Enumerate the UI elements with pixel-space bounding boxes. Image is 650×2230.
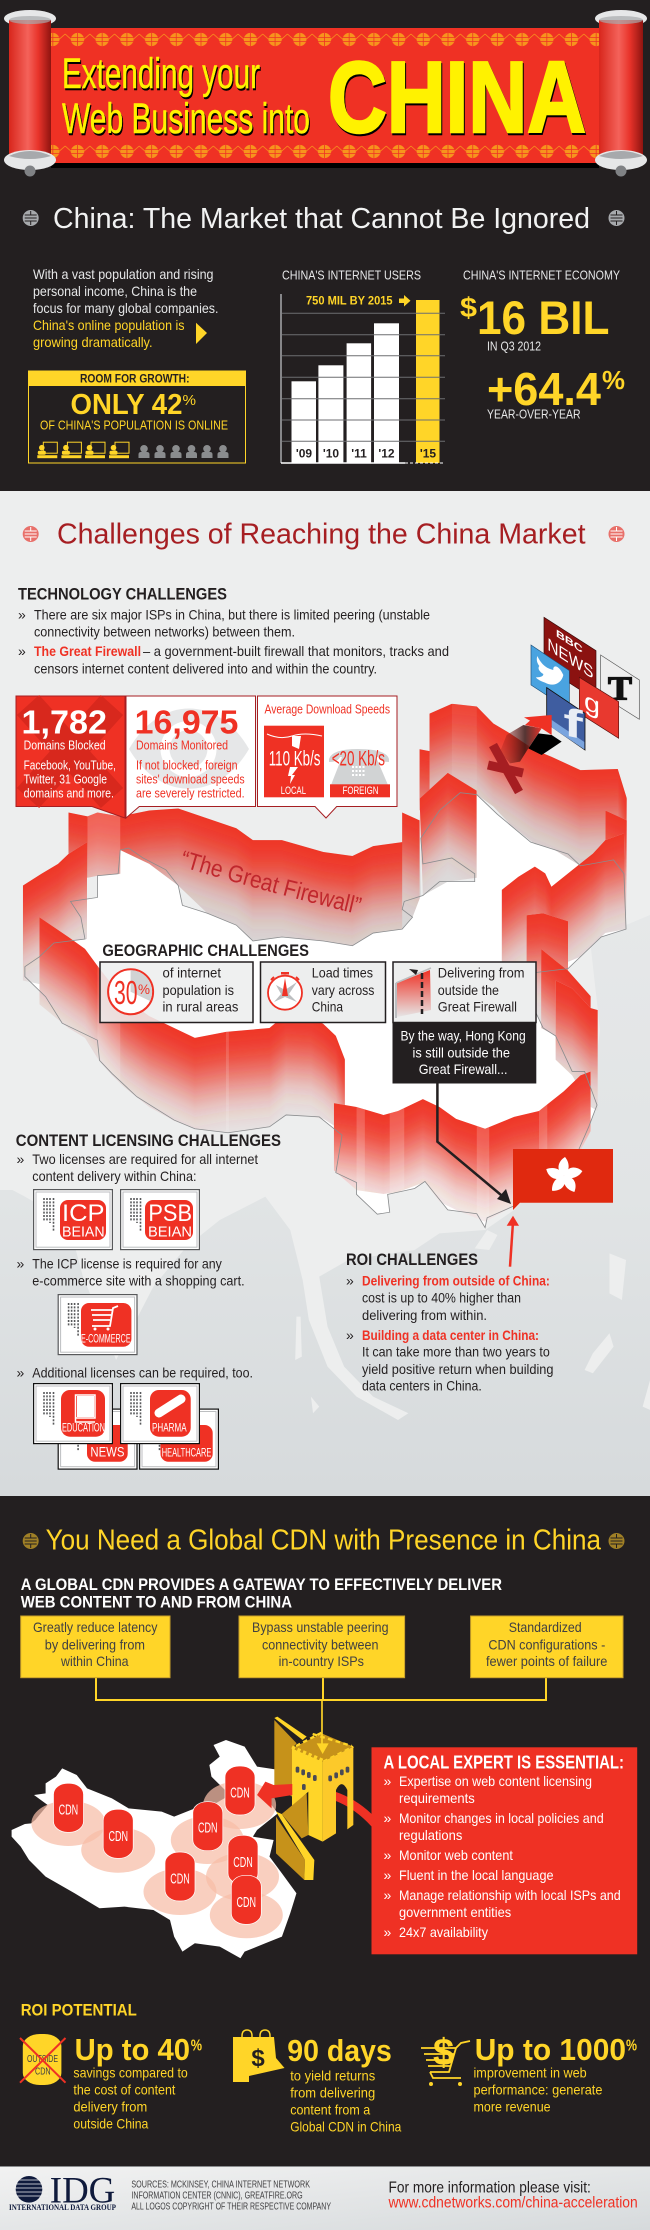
text block: technology challenges: There are six major ISPs in China, but there is limited peering (unstable	[34, 606, 430, 622]
text block: content licensing challenges: Additional licenses can be required, too.	[32, 1365, 253, 1381]
panel: a local expert is essential: requirements	[399, 1790, 475, 1806]
text block: content licensing challenges: CONTENT LICENSING CHALLENGES	[16, 1131, 281, 1150]
panel: a local expert is essential	[372, 1747, 637, 1954]
callout: domains blocked: domains and more.	[24, 785, 114, 800]
text block: content licensing challenges: content delivery within China:	[32, 1168, 196, 1184]
stat: 90 days	[233, 2030, 401, 2134]
text block: roi challenges: It can take more than two years to	[362, 1344, 550, 1360]
stat: savings	[20, 2032, 202, 2132]
tile: facebook: f	[563, 698, 583, 748]
icon: red cross block	[488, 745, 523, 792]
callout: domains monitored: are severely restricted.	[136, 785, 245, 800]
box: reduce latency: within China	[60, 1653, 129, 1669]
callout: hong kong note: is still outside the	[412, 1045, 510, 1061]
panel: room for growth: OF CHINA'S POPULATION IS ONLINE	[40, 417, 228, 432]
text block: roi challenges: yield positive return when building	[362, 1361, 554, 1377]
stat: 90 days: 90 days	[287, 2033, 392, 2068]
serpentine wall	[282, 1793, 308, 1838]
stat: savings: delivery from	[73, 2099, 147, 2115]
right scroll roller	[595, 10, 647, 176]
stat: savings: savings compared to	[73, 2065, 188, 2081]
license card: news	[58, 1409, 137, 1469]
arrow: red arrow to flag	[507, 1216, 519, 1267]
callout: domains blocked: Facebook, YouTube,	[24, 757, 116, 772]
box: reduce latency: by delivering from	[45, 1636, 145, 1652]
intro text block	[33, 266, 218, 350]
title text: Web Business into	[62, 95, 310, 143]
stat: 90 days: content from a	[290, 2101, 370, 2117]
local speed	[264, 726, 324, 797]
intro text block: personal income, China is the	[33, 283, 197, 299]
subheading: gateway: A GLOBAL CDN PROVIDES A GATEWAY TO EFFECTIVELY DELIVER	[21, 1575, 502, 1594]
bar chart: china's internet users: '15	[420, 446, 436, 460]
icon: great wall tower	[274, 1700, 372, 1880]
license card: e-commerce	[58, 1295, 137, 1355]
white china map	[12, 1740, 296, 1958]
callout: domains monitored: Domains Monitored	[136, 737, 228, 752]
subheading: gateway: WEB CONTENT TO AND FROM CHINA	[21, 1592, 292, 1611]
heading: the market	[23, 203, 624, 235]
stats: internet economy: CHINA'S INTERNET ECONOMY	[463, 267, 620, 282]
box: reduce latency: Greatly reduce latency	[33, 1619, 158, 1635]
panel: a local expert is essential: Monitor web content	[399, 1847, 513, 1863]
sources	[131, 2179, 331, 2212]
text block: roi challenges: ROI CHALLENGES	[346, 1250, 478, 1269]
text block: technology challenges: »	[18, 643, 26, 659]
callout: domains monitored: 16,975	[135, 703, 238, 740]
world map sea	[0, 915, 650, 1496]
icon: medallion right	[608, 526, 624, 542]
stats: internet economy: $	[460, 292, 477, 323]
panel: room for growth: ROOM FOR GROWTH:	[80, 372, 190, 386]
panel: roi potential: ROI POTENTIAL	[21, 2001, 137, 2020]
text block: content licensing challenges	[16, 1131, 281, 1381]
wall: east fourth layer	[556, 980, 598, 1110]
stat: 1000 percent: improvement in web	[474, 2065, 587, 2081]
china land	[25, 793, 626, 1228]
panel: a local expert is essential: »	[384, 1887, 392, 1903]
map: china with cdn nodes	[12, 1740, 296, 1958]
arrow into tower	[319, 1700, 324, 1744]
box: delivering from outside	[393, 962, 536, 1022]
text block: roi challenges	[346, 1250, 554, 1394]
box: load times: China	[312, 999, 343, 1015]
callout: average download speeds	[258, 696, 397, 818]
tower top	[292, 1733, 353, 1762]
panel: a local expert is essential: »	[384, 1847, 392, 1863]
bar chart: china's internet users	[281, 267, 445, 463]
connector lines	[96, 1677, 546, 1700]
panel: geographic challenges	[100, 941, 536, 1084]
icons: online people	[37, 442, 228, 458]
icon: outside cdn crossed out	[20, 2034, 66, 2085]
wall: south	[334, 1072, 591, 1222]
arrow: tower to cdn node	[257, 1782, 292, 1808]
tile: new york times: T	[608, 670, 632, 707]
text block: roi challenges: cost is up to 40% higher than	[362, 1290, 521, 1306]
icon: eye watermark	[129, 708, 249, 789]
text block: content licensing challenges: »	[16, 1365, 24, 1381]
banner red sheet	[51, 28, 599, 168]
panel: challenges background	[0, 491, 650, 1496]
wall: east third layer	[541, 949, 591, 1036]
stat: 1000 percent: Up to 1000	[475, 2032, 626, 2067]
text block: technology challenges: TECHNOLOGY CHALLENGES	[18, 584, 227, 603]
callout: hong kong note	[392, 1022, 536, 1084]
bar chart: china's internet users: '09	[296, 446, 312, 460]
box: rural population: 30	[114, 974, 138, 1011]
icon: medallion left	[23, 1533, 39, 1549]
cdn labels: CDN	[233, 1854, 253, 1871]
box: rural population: %	[138, 981, 150, 997]
icon: blocked social media	[531, 617, 639, 750]
license card: healthcare	[140, 1409, 218, 1469]
wall: north and north-east	[68, 704, 627, 946]
tile: bbc news: NEWS	[547, 635, 593, 684]
stats: internet economy: IN Q3 2012	[487, 339, 541, 354]
red band to expert panel	[335, 1792, 372, 1827]
stat: 1000 percent	[421, 2032, 637, 2115]
license card: pharma: PHARMA	[152, 1421, 187, 1435]
cdn labels: CDN	[230, 1785, 250, 1802]
box: delivering from outside: Great Firewall	[438, 999, 517, 1015]
license card: icp beian: BEIAN	[62, 1224, 105, 1241]
callout: domains blocked: 1,782	[22, 703, 107, 740]
bar chart: china's internet users: 750 MIL BY 2015	[306, 293, 393, 307]
bar chart: china's internet users: '10	[323, 446, 339, 460]
panel: room for growth: %	[182, 392, 196, 409]
panel: a local expert is essential: Fluent in the local language	[399, 1867, 554, 1883]
tower left face	[292, 1748, 323, 1842]
stats: internet economy: +64.4	[487, 363, 601, 415]
stats: internet economy: YEAR-OVER-YEAR	[487, 406, 580, 421]
text block: technology challenges: censors internet content delivered into and within the country.	[34, 660, 377, 676]
callout: domains monitored	[126, 696, 256, 818]
cdn labels: CDN	[59, 1801, 78, 1818]
box: bypass peering	[239, 1616, 405, 1678]
intro text block: focus for many global companies.	[33, 300, 218, 316]
text block: roi challenges: delivering from within.	[362, 1307, 487, 1323]
box: rural population: in rural areas	[162, 999, 238, 1015]
stat: 1000 percent: performance: generate	[474, 2082, 603, 2098]
callout: domains monitored: sites' download speeds	[136, 771, 245, 786]
callout: hong kong note: Great Firewall...	[419, 1061, 508, 1077]
panel: a local expert is essential: »	[384, 1924, 392, 1940]
stats: internet economy	[460, 267, 625, 421]
stat: savings: Up to 40	[75, 2032, 190, 2067]
wall: south-west	[40, 918, 345, 1132]
sources: SOURCES: MCKINSEY, CHINA INTERNET NETWORK	[131, 2179, 310, 2190]
back wall	[274, 1720, 297, 1797]
footer	[0, 2166, 650, 2230]
panel: a local expert is essential: »	[384, 1773, 392, 1789]
icon: medallion right	[608, 210, 624, 226]
banner: title scroll	[4, 10, 647, 176]
intro text block: With a vast population and rising	[33, 266, 214, 282]
text block: technology challenges: »	[18, 606, 26, 622]
license card: news: NEWS	[90, 1444, 124, 1460]
license card: education	[34, 1384, 112, 1444]
local speed: 110 Kb/s	[269, 747, 320, 770]
panel: a local expert is essential: »	[384, 1867, 392, 1883]
panel: a local expert is essential: Monitor changes in local policies and	[399, 1810, 604, 1826]
box: load times: Load times	[312, 965, 373, 981]
license card: psb beian: BEIAN	[148, 1224, 192, 1241]
title text	[62, 42, 586, 154]
more information	[388, 2180, 638, 2212]
license card: psb beian	[121, 1190, 199, 1250]
text block: content licensing challenges: The ICP license is required for any	[32, 1255, 222, 1271]
panel: a local expert is essential: 24x7 availability	[399, 1924, 488, 1940]
license card: icp beian: ICP	[62, 1200, 104, 1227]
foreign speed: FOREIGN	[342, 785, 379, 797]
callout: domains blocked: Domains Blocked	[24, 737, 106, 752]
callout: domains blocked: Twitter, 31 Google	[24, 771, 107, 786]
stats: internet economy: %	[602, 365, 625, 395]
license card: healthcare: HEALTHCARE	[162, 1446, 211, 1460]
cdn labels: CDN	[198, 1820, 217, 1837]
panel: a local expert is essential: »	[384, 1810, 392, 1826]
stat: 90 days: Global CDN in China	[290, 2118, 401, 2134]
license card: pharma	[121, 1384, 199, 1444]
panel: a local expert is essential: regulations	[399, 1827, 462, 1843]
intro text block: China's online population is	[33, 317, 184, 333]
icon: hong kong flag	[513, 1149, 613, 1210]
icon: shopping bag: $	[251, 2045, 265, 2072]
box: rural population: of internet	[162, 965, 221, 981]
callout: hong kong note: By the way, Hong Kong	[400, 1028, 526, 1044]
text block: content licensing challenges: »	[16, 1255, 24, 1271]
stat: 90 days: to yield returns	[290, 2067, 375, 2083]
icon: outside cdn crossed out: OUTSIDE	[27, 2054, 58, 2065]
local speed: LOCAL	[281, 785, 306, 797]
cdn labels: CDN	[237, 1894, 256, 1911]
text block: technology challenges: The Great Firewall	[34, 643, 141, 659]
cdn labels: CDN	[108, 1828, 128, 1845]
cdn labels	[59, 1785, 256, 1911]
wall: east	[502, 834, 626, 962]
box: load times	[260, 962, 386, 1022]
text block: roi challenges: Delivering from outside of China:	[362, 1273, 550, 1289]
bar chart: china's internet users: '11	[351, 446, 367, 460]
icon: shopping bag	[233, 2030, 284, 2082]
text block: roi challenges: »	[346, 1273, 354, 1289]
text block: content licensing challenges: e-commerce site with a shopping cart.	[32, 1273, 245, 1289]
heading text: China: The Market that Cannot Be Ignored	[53, 203, 590, 235]
bar chart: china's internet users: '12	[378, 446, 395, 460]
box: delivering from outside: outside the	[438, 982, 499, 998]
box: standardized: Standardized	[509, 1619, 582, 1635]
box: standardized: CDN configurations -	[488, 1636, 606, 1652]
text block: technology challenges: – a government-built firewall that monitors, tracks and	[143, 643, 449, 659]
panel: a local expert is essential: Manage relationship with local ISPs and	[399, 1887, 621, 1903]
stats: internet economy: 16 BIL	[477, 291, 610, 344]
more information: For more information please visit:	[388, 2180, 591, 2197]
heading: need a global cdn	[23, 1524, 624, 1556]
panel: a local expert is essential: Expertise on web content licensing	[399, 1773, 592, 1789]
intro text block: growing dramatically.	[33, 334, 153, 350]
panel: room for growth: ONLY 42	[70, 389, 182, 421]
box: load times: vary across	[312, 982, 374, 998]
curved label: the great firewall: “The Great Firewall”	[183, 850, 362, 912]
tile: twitter	[531, 645, 569, 710]
stat: 1000 percent: more revenue	[474, 2099, 551, 2115]
wall: east second layer	[526, 914, 568, 1022]
license card: e-commerce: E-COMMERCE	[81, 1331, 131, 1345]
subheading: gateway	[21, 1575, 502, 1611]
panel: roi potential	[20, 2001, 637, 2134]
box: standardized: fewer points of failure	[486, 1653, 608, 1669]
title text: CHINA	[328, 42, 586, 154]
box: bypass peering: connectivity between	[262, 1636, 378, 1652]
stat: savings: the cost of content	[73, 2082, 175, 2098]
left scroll roller	[4, 10, 56, 176]
foreign speed	[329, 747, 390, 797]
box: delivering from outside: Delivering from	[438, 965, 524, 981]
box: bypass peering: in-country ISPs	[279, 1653, 364, 1669]
icon: medallion left	[23, 526, 39, 542]
license card: icp beian	[34, 1190, 112, 1250]
tile: bbc news: BBC	[556, 628, 583, 656]
tower right face	[323, 1747, 353, 1842]
text block: content licensing challenges: Two licenses are required for all internet	[32, 1151, 258, 1167]
idg logo: IDG	[50, 2171, 115, 2212]
title text: Extending your	[62, 50, 260, 98]
wall: west back	[22, 842, 87, 984]
wall: north inner step	[420, 773, 477, 895]
callout: average download speeds: Average Download Speeds	[264, 702, 390, 716]
callout: domains blocked	[16, 696, 125, 818]
stat: savings: %	[191, 2038, 202, 2055]
cdn labels: CDN	[170, 1870, 190, 1887]
tile: bbc news	[544, 617, 596, 700]
idg logo	[9, 2171, 116, 2212]
tile: google: g	[584, 686, 600, 721]
idg logo: INTERNATIONAL DATA GROUP	[9, 2203, 116, 2212]
text block: technology challenges	[18, 584, 449, 676]
icon: medallion left	[23, 210, 39, 226]
box: reduce latency	[21, 1616, 170, 1678]
icon: medallion right	[608, 1533, 624, 1549]
panel: room for growth	[28, 371, 246, 463]
box: rural population: population is	[162, 982, 234, 998]
icon: outside cdn crossed out: CDN	[35, 2066, 51, 2077]
text block: roi challenges: Building a data center in China:	[362, 1327, 539, 1343]
license card: education: EDUCATION	[62, 1421, 105, 1435]
arrow: hong kong pointer	[437, 1083, 511, 1204]
stat: 1000 percent: %	[626, 2038, 637, 2055]
cdn coverage zones	[31, 1781, 283, 1938]
tower windows	[296, 1767, 349, 1790]
bar chart: china's internet users: CHINA'S INTERNET USERS	[282, 267, 421, 282]
cdn nodes	[54, 1766, 261, 1924]
heading: challenges	[23, 518, 624, 550]
text block: content licensing challenges: »	[16, 1151, 24, 1167]
box: bypass peering: Bypass unstable peering	[252, 1619, 388, 1635]
sources: ALL LOGOS COPYRIGHT OF THEIR RESPECTIVE COMPANY	[131, 2201, 331, 2212]
text block: roi challenges: data centers in China.	[362, 1378, 482, 1394]
text block: technology challenges: connectivity between networks) between them.	[34, 624, 295, 640]
panel: a local expert is essential: government entities	[399, 1904, 511, 1920]
arrow: blocked connection	[500, 715, 562, 763]
heading text: Challenges of Reaching the China Market	[57, 518, 586, 550]
callout: domains monitored: If not blocked, foreign	[136, 757, 238, 772]
icon: cart with dollar	[421, 2032, 470, 2086]
map: great firewall of china	[22, 704, 627, 1229]
license card: psb beian: PSB	[148, 1200, 192, 1227]
icon: cart with dollar: $	[433, 2032, 454, 2074]
wall: north-east edge	[605, 810, 627, 912]
foreign speed: <20 Kb/s	[332, 747, 385, 770]
heading text: You Need a Global CDN with Presence in China	[46, 1524, 602, 1556]
sources: INFORMATION CENTER (CNNIC), GREATFIRE.ORG	[131, 2190, 303, 2201]
text block: roi challenges: »	[346, 1327, 354, 1343]
stat: 90 days: from delivering	[290, 2084, 375, 2100]
panel: geographic challenges: GEOGRAPHIC CHALLENGES	[102, 941, 309, 960]
box: standardized	[471, 1616, 623, 1678]
china outline	[25, 793, 626, 1228]
stat: savings: outside China	[73, 2116, 149, 2132]
box: rural population	[100, 962, 253, 1022]
